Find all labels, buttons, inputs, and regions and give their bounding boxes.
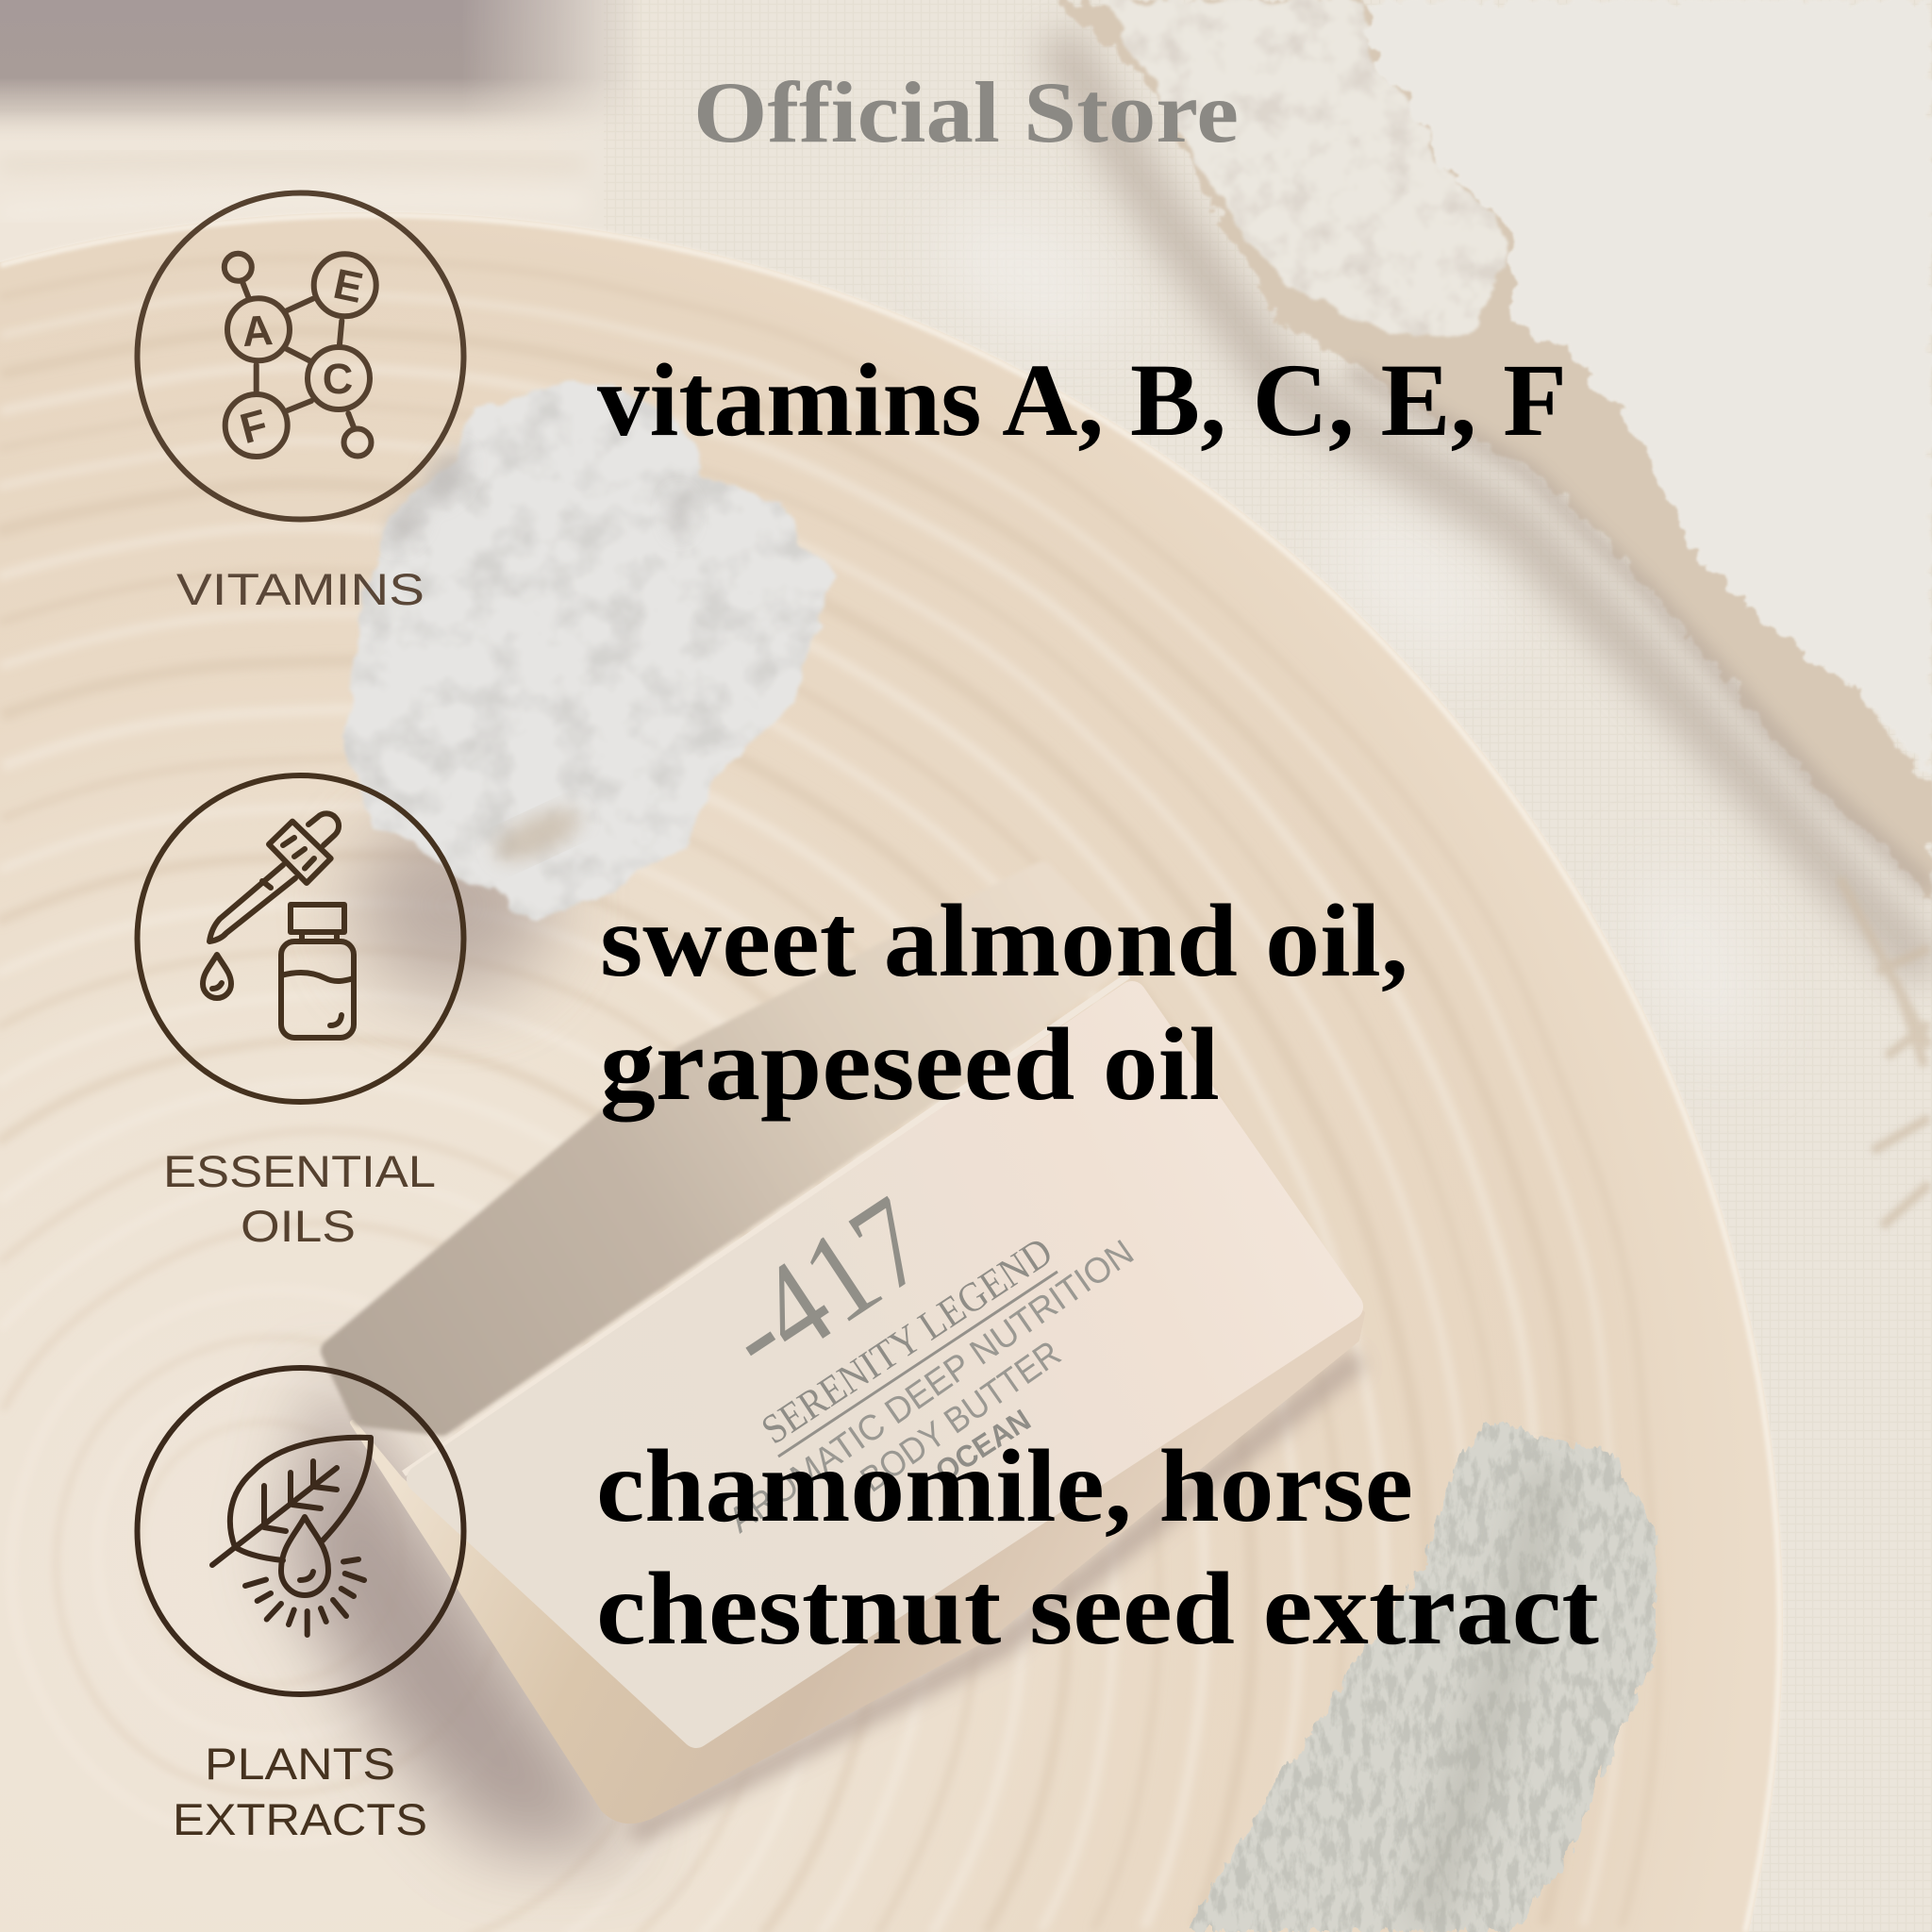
jar text: ocean: OCEAN <box>929 1403 1037 1489</box>
background: textile highlights <box>910 173 1785 1076</box>
icon: vitamins: E <box>329 259 367 312</box>
icon: vitamins <box>138 192 464 519</box>
main text: oils: sweet almond oil, <box>600 883 1408 998</box>
background: white rock <box>343 385 833 921</box>
jar product <box>332 873 1362 1821</box>
jar text: 417: -417 <box>699 1170 952 1403</box>
background: grey rock <box>1190 1423 1656 1932</box>
main text: oils: grapeseed oil <box>600 1007 1220 1122</box>
main text: oils <box>600 883 1408 1122</box>
jar text: aromatic: AROMATIC DEEP NUTRITION <box>722 1233 1141 1541</box>
background: fringe right edge <box>1840 877 1929 1226</box>
background: dark band top left <box>0 0 623 128</box>
background: board shadow line <box>1349 370 1932 891</box>
jar: lid side <box>332 873 1123 1424</box>
icon: vitamins: C <box>323 355 353 403</box>
label: essential oils: OILS <box>241 1201 356 1251</box>
jar: light lip <box>404 975 1128 1474</box>
background: pale surface top right <box>1366 0 1932 774</box>
icon: vitamins: F <box>235 400 273 453</box>
main text: extracts: chestnut seed extract <box>596 1551 1599 1666</box>
label: plants extracts: EXTRACTS <box>173 1794 427 1844</box>
background: shadow below white rock <box>354 816 552 995</box>
background: weave texture <box>604 0 1932 1932</box>
icon: plants extracts <box>138 1368 464 1694</box>
background: cream cloth upper left <box>0 0 755 396</box>
icon: vitamins: A <box>241 306 275 356</box>
background: crumbly inner board <box>1101 0 1511 338</box>
background: jar base shadow <box>632 1358 1358 1835</box>
label: essential oils <box>163 1146 436 1251</box>
jar text: body butter: BODY BUTTER <box>854 1334 1068 1500</box>
label: essential oils: ESSENTIAL <box>163 1146 436 1196</box>
background: jar shadow <box>283 1368 637 1849</box>
main text: extracts: chamomile, horse <box>596 1428 1413 1543</box>
jar rule <box>778 1272 1058 1457</box>
background: rock shaded creases <box>382 441 689 550</box>
label: plants extracts <box>173 1739 427 1844</box>
icon: essential oils <box>138 775 464 1102</box>
background: textile shadow along board <box>1057 38 1929 972</box>
background: plate grain rings <box>0 255 1660 1932</box>
jar: top face <box>421 995 1349 1734</box>
background: torn tan board <box>1057 0 1932 900</box>
background: rock tan patch <box>487 798 589 872</box>
jar: side band <box>353 1313 1362 1821</box>
label: vitamins: VITAMINS <box>176 564 425 614</box>
background: cloth streaks upper left <box>0 160 585 212</box>
title: Official Store <box>693 64 1239 160</box>
background: grey rock dark streak <box>1424 1472 1547 1924</box>
main text: extracts <box>596 1428 1599 1666</box>
main text: vitamins: vitamins A, B, C, E, F <box>597 342 1567 458</box>
label: plants extracts: PLANTS <box>205 1739 395 1789</box>
jar text: serenity legend: SERENITY LEGEND <box>753 1228 1060 1453</box>
